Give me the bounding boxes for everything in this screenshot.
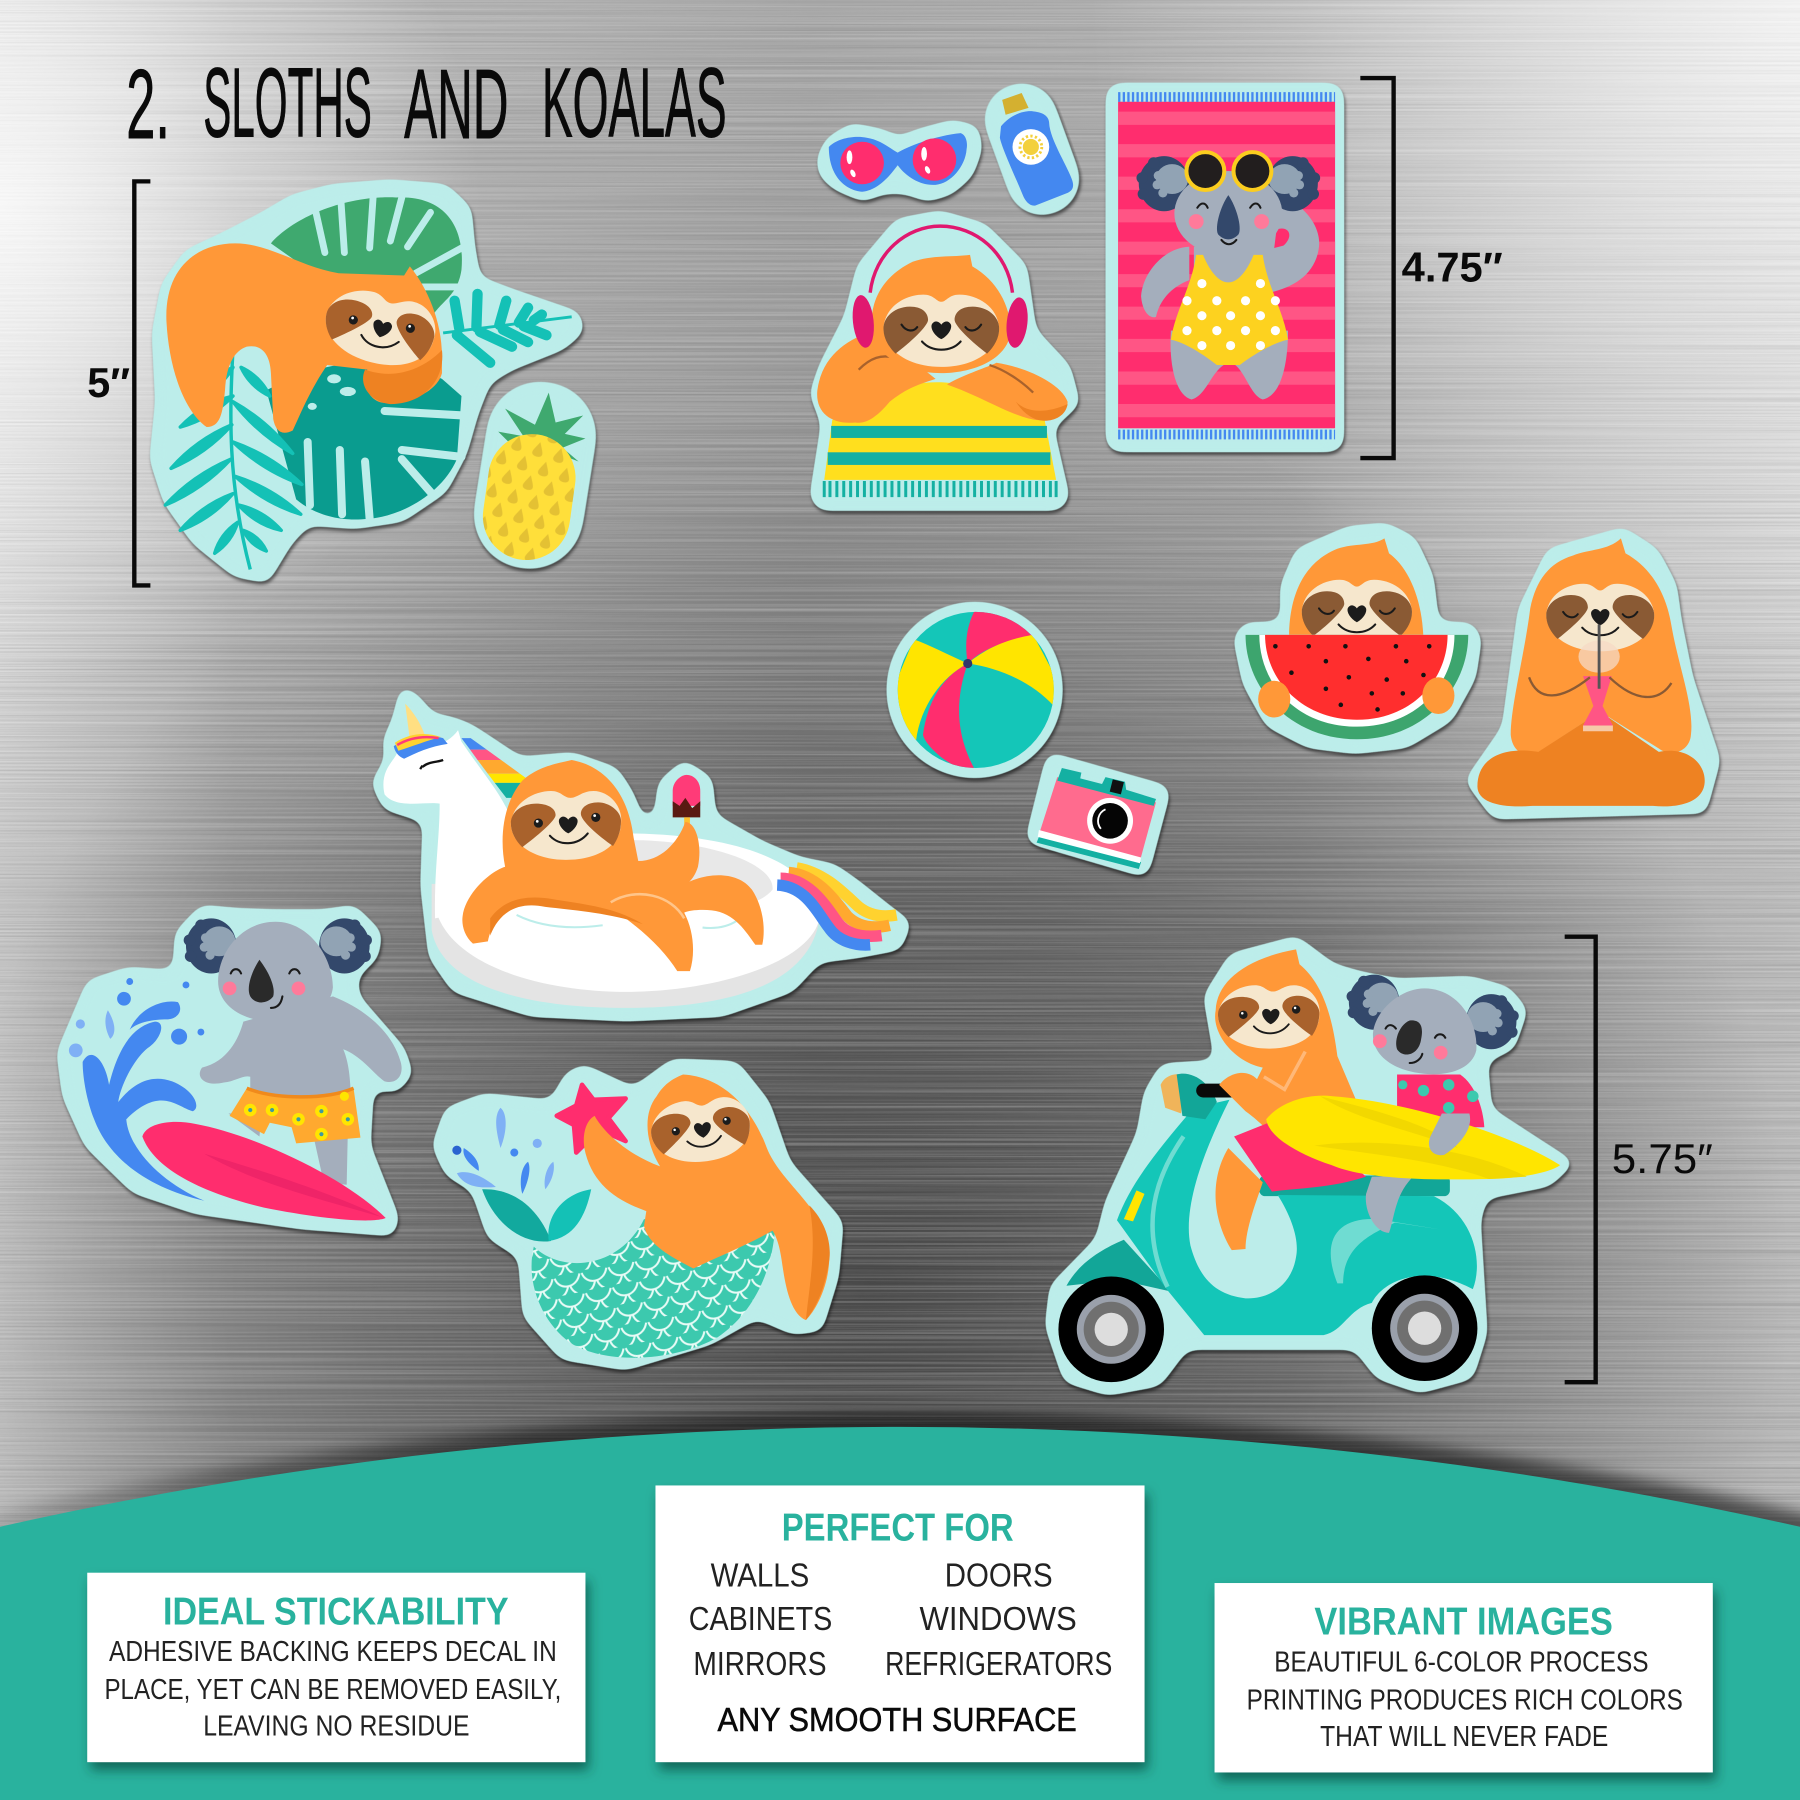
sticker: sunscreen bottle (979, 77, 1085, 221)
scooter handlebar and headlamp (1161, 1074, 1240, 1119)
dimension bracket: 5 inch: 5″ (87, 360, 130, 406)
panel: vibrant images (1215, 1583, 1713, 1772)
unicorn horn (405, 704, 427, 748)
sticker: sloth sipping drink (1468, 530, 1717, 816)
dimension bracket: 5.75 inch (1565, 937, 1713, 1382)
teal fern leaf bottom left (165, 348, 302, 569)
sticker: pineapple (470, 378, 600, 573)
body text: PRINTING PRODUCES RICH COLORS (1247, 1684, 1683, 1716)
shorts (230, 1088, 360, 1143)
camera lens (1087, 798, 1133, 844)
rainbow mane (394, 734, 540, 798)
scooter seat (1259, 1176, 1450, 1196)
body text (1247, 1646, 1683, 1753)
ball segments (898, 612, 1054, 768)
popsicle (673, 775, 700, 827)
sticker: sloth with headphones on blanket (813, 214, 1077, 507)
title: 2. (126, 49, 170, 159)
drops (452, 1108, 554, 1194)
bottle cap (1002, 93, 1029, 115)
body text: THAT WILL NEVER FADE (1320, 1721, 1608, 1753)
rainbow tail (777, 868, 897, 945)
sticker: beach ball (890, 605, 1062, 775)
sloth body (584, 1074, 830, 1320)
sloth hanging (166, 243, 442, 433)
watermelon slice (1246, 635, 1468, 739)
hands (1529, 677, 1671, 697)
surface list (689, 1557, 1112, 1683)
surface list: WINDOWS (920, 1601, 1077, 1638)
sticker: watermelon sloth (1236, 526, 1479, 751)
body text: ADHESIVE BACKING KEEPS DECAL IN (109, 1636, 557, 1668)
sticker: sloth on unicorn float (374, 690, 908, 1018)
heading: PERFECT FOR (782, 1507, 1014, 1550)
koala head (1136, 156, 1320, 256)
sticker: sloth and koala on scooter (1048, 939, 1570, 1392)
yellow surfboard (1266, 1096, 1560, 1179)
ball valve (963, 659, 972, 668)
float (432, 833, 820, 1008)
koala legs (228, 1114, 348, 1185)
sun label (1012, 129, 1049, 165)
sloth driver (1215, 949, 1366, 1250)
koala on scooter (1347, 975, 1519, 1127)
any smooth surface: ANY SMOOTH SURFACE (717, 1702, 1077, 1739)
teal footer arc (0, 1412, 1800, 1800)
surface list: DOORS (945, 1557, 1053, 1594)
pineapple body (477, 428, 581, 566)
koala arms and legs (1141, 195, 1319, 399)
dimension bracket: 5.75 inch: 5.75″ (1612, 1136, 1713, 1182)
koala arm (1429, 1114, 1470, 1155)
mermaid tail scales (532, 1219, 775, 1358)
dimension bracket: 4.75 inch (1360, 78, 1503, 458)
title (126, 48, 727, 159)
panel: perfect for (655, 1485, 1145, 1762)
sticker: mermaid sloth (435, 1062, 840, 1367)
dark green monstera leaf (271, 197, 464, 327)
unicorn head and neck (383, 730, 517, 918)
sticker: koala on beach towel (1109, 86, 1341, 449)
pink gap under raised arm (1274, 228, 1289, 248)
surface list: MIRRORS (693, 1646, 827, 1683)
dark teal monstera leaf (266, 362, 465, 519)
title: SLOTHS (203, 48, 372, 158)
koala sunglasses (1186, 152, 1271, 190)
dimension bracket: 5 inch (87, 181, 150, 585)
drink cup (1578, 624, 1620, 731)
sticker: koala surfer (60, 908, 410, 1233)
title: AND (404, 49, 509, 159)
surface list: REFRIGERATORS (885, 1646, 1112, 1683)
camera body (1037, 768, 1156, 869)
sloth head (1289, 538, 1424, 635)
blanket (824, 382, 1056, 497)
surfboard (142, 1122, 386, 1220)
heading: VIBRANT IMAGES (1314, 1601, 1613, 1644)
surface list: WALLS (711, 1557, 809, 1594)
sloth arms (817, 331, 1068, 423)
body text: BEAUTIFUL 6-COLOR PROCESS (1274, 1646, 1648, 1678)
sloth body (1511, 538, 1691, 754)
koala head (184, 918, 372, 1022)
starfish (557, 1085, 626, 1153)
towel (1118, 97, 1335, 435)
pineapple crown (498, 393, 585, 461)
sticker: camera (1029, 756, 1167, 873)
mermaid fin (482, 1189, 591, 1242)
koala body (200, 996, 402, 1102)
heading: IDEAL STICKABILITY (163, 1590, 509, 1633)
dimension bracket: 4.75 inch: 4.75″ (1402, 244, 1503, 290)
body text: LEAVING NO RESIDUE (203, 1711, 470, 1743)
body text (104, 1636, 561, 1743)
surface list: CABINETS (689, 1601, 832, 1638)
left lens (840, 142, 884, 184)
sticker: sloth on tropical leaves (153, 183, 581, 580)
sunglasses frame (829, 133, 967, 192)
crossed legs (1477, 712, 1705, 806)
rear wheel (1372, 1275, 1477, 1381)
body text: PLACE, YET CAN BE REMOVED EASILY, (104, 1674, 561, 1706)
sloth head (872, 255, 1010, 373)
teal fern leaf right (443, 294, 572, 363)
sticker: sunglasses (820, 123, 979, 199)
text: KOALAS (542, 48, 727, 158)
bottle body (1000, 111, 1073, 206)
scooter fender (1066, 1240, 1171, 1291)
panel: ideal stickability (87, 1573, 585, 1762)
headphones (850, 226, 1030, 349)
wave and drops (69, 978, 204, 1201)
scooter body (1117, 1100, 1477, 1335)
koala swimsuit (1171, 255, 1288, 365)
koala leg (1366, 1176, 1414, 1233)
right lens (913, 138, 956, 181)
sloth (462, 760, 764, 971)
front wheel (1058, 1277, 1164, 1382)
sloth hands (1258, 677, 1454, 717)
